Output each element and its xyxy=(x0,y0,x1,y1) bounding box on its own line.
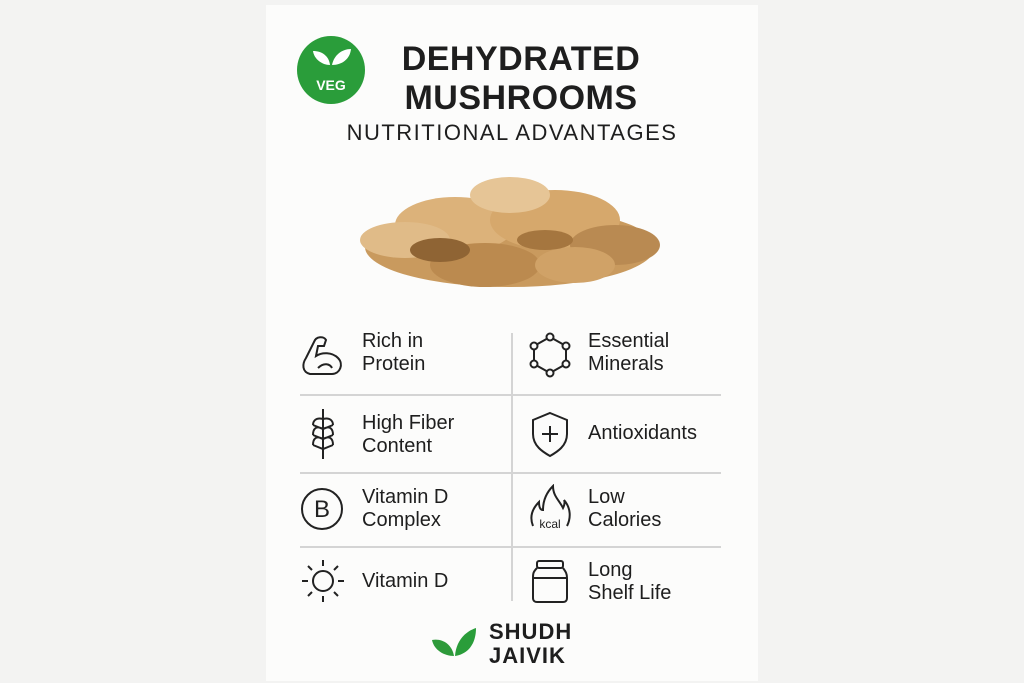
item: rich in protein: Protein xyxy=(362,353,425,375)
card xyxy=(266,5,758,681)
item: high fiber xyxy=(312,409,454,459)
item: vitamin b complex: B xyxy=(314,496,330,523)
item: rich in protein: Rich in xyxy=(362,330,423,352)
item: low calories: Low xyxy=(588,486,625,508)
icon: veg badge xyxy=(297,36,365,104)
item: vitamin b complex: Complex xyxy=(362,509,441,531)
item: antioxidants xyxy=(532,412,697,458)
item: long shelf life: Shelf Life xyxy=(588,582,671,604)
item: rich in protein xyxy=(302,330,425,375)
item: vitamin d xyxy=(302,560,448,602)
subtitle: NUTRITIONAL ADVANTAGES xyxy=(347,120,677,145)
title: DEHYDRATED xyxy=(402,40,640,78)
title xyxy=(402,40,640,117)
item: high fiber: Content xyxy=(362,435,432,457)
item: vitamin b complex xyxy=(301,486,448,531)
item: low calories: Calories xyxy=(588,509,661,531)
title: MUSHROOMS xyxy=(404,79,638,117)
item: essential minerals: Minerals xyxy=(588,353,664,375)
item: vitamin b complex: Vitamin D xyxy=(362,486,448,508)
item: high fiber: High Fiber xyxy=(362,412,454,434)
item: essential minerals xyxy=(530,330,669,378)
item: antioxidants: Antioxidants xyxy=(588,422,697,444)
item: low calories xyxy=(530,484,661,531)
grid dividers xyxy=(300,394,721,396)
icon: veg badge: VEG xyxy=(316,77,346,93)
item: essential minerals: Essential xyxy=(588,330,669,352)
item: long shelf life xyxy=(532,559,671,604)
brand logo xyxy=(432,619,572,668)
brand logo: SHUDH xyxy=(489,619,572,644)
mushroom pile image xyxy=(360,177,660,287)
item: low calories: kcal xyxy=(539,517,561,531)
brand logo: JAIVIK xyxy=(489,643,566,668)
item: vitamin d: Vitamin D xyxy=(362,570,448,592)
item: long shelf life: Long xyxy=(588,559,632,581)
